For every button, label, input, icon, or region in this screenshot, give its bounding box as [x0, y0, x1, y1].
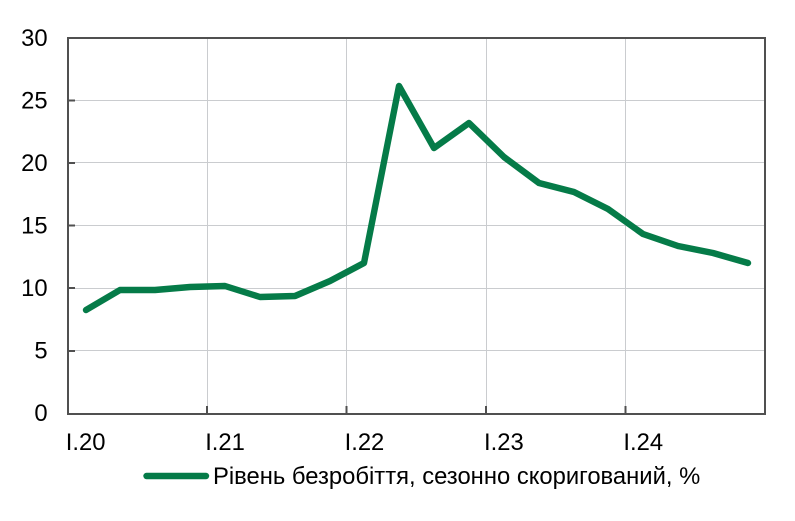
x axis labels: I.21	[205, 429, 245, 456]
y axis labels: 20	[21, 150, 48, 177]
x axis labels	[66, 429, 663, 456]
legend: Рівень безробіття, сезонно скоригований, %	[213, 463, 700, 490]
plot frame and axes	[68, 38, 765, 414]
x axis labels: I.22	[345, 429, 384, 456]
y axis labels: 15	[21, 212, 48, 240]
y axis labels	[21, 25, 48, 427]
y axis labels: 0	[34, 400, 48, 427]
data line	[86, 86, 748, 310]
y axis labels: 30	[21, 25, 48, 52]
x axis labels: I.24	[623, 429, 663, 456]
y axis labels: 5	[34, 338, 48, 364]
x axis labels: I.20	[66, 429, 106, 456]
y axis labels: 25	[21, 88, 48, 114]
x axis labels: I.23	[484, 429, 524, 456]
y axis labels: 10	[21, 275, 48, 302]
